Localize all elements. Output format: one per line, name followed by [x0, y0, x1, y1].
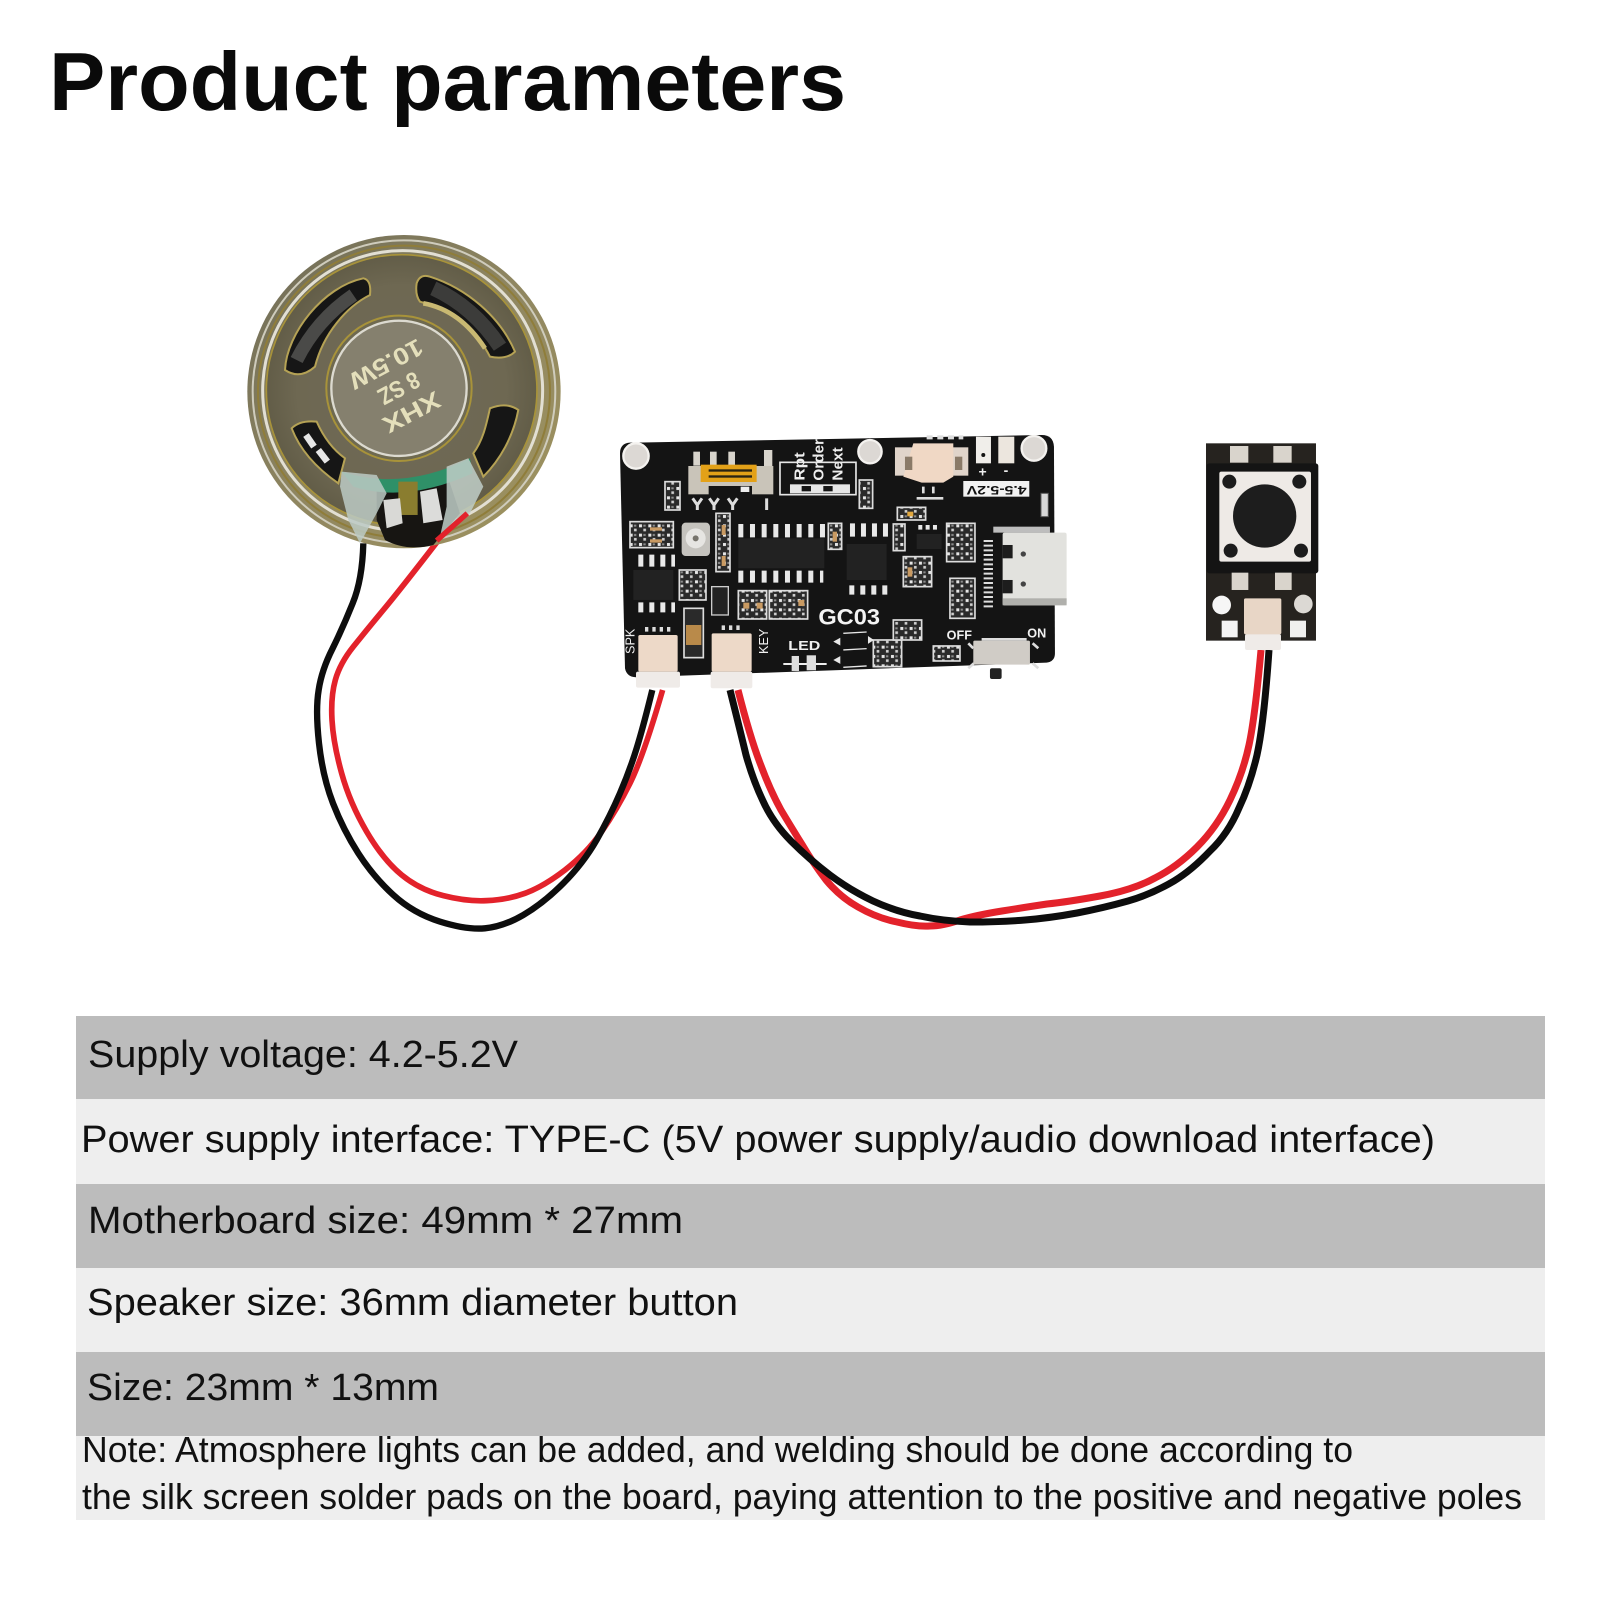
module holes and pads	[1212, 595, 1313, 637]
mode labels: Next	[830, 447, 846, 481]
row: note	[76, 1429, 1545, 1520]
chip pins	[638, 527, 940, 667]
mode labels	[780, 439, 856, 495]
LED pads	[783, 655, 827, 671]
silk labels: OFF	[947, 628, 972, 642]
wire: button black lead	[730, 650, 1269, 922]
row: speaker size	[76, 1268, 1545, 1352]
row: speaker size: Speaker size: 36mm diameter button	[87, 1282, 738, 1324]
wire: button red lead	[738, 650, 1261, 926]
tantalum capacitor	[684, 608, 703, 658]
USB type-C connector	[988, 527, 1067, 610]
speaker	[247, 235, 561, 548]
speaker centre cap	[326, 316, 472, 461]
silk labels: LED	[788, 639, 820, 653]
button pads	[1230, 446, 1292, 590]
specification table	[76, 1016, 1545, 1520]
silk labels	[624, 626, 1046, 654]
row: supply voltage: Supply voltage: 4.2-5.2V	[88, 1034, 519, 1076]
mode slide switch	[688, 450, 773, 510]
chips	[633, 534, 942, 615]
row: motherboard size: Motherboard size: 49mm * 27mm	[88, 1200, 683, 1242]
power pads: +	[979, 464, 987, 480]
title: Product parameters	[49, 35, 846, 128]
SPK connector	[636, 629, 680, 688]
circuit board	[620, 435, 1067, 688]
button white frame	[1219, 472, 1311, 562]
row: power supply interface: Power supply interface: TYPE-C (5V power supply/audio download interface)	[81, 1119, 1435, 1161]
indicator	[1041, 493, 1048, 517]
mode labels: Order	[811, 439, 827, 481]
voltage label: 4.5-5.2V	[967, 483, 1027, 497]
speaker centre cap: 10.5W	[344, 333, 427, 394]
speaker centre cap: 8 SZ	[373, 365, 424, 410]
button corner dots	[1222, 475, 1308, 558]
silk labels: ON	[1027, 626, 1046, 640]
row: power supply interface	[76, 1099, 1545, 1184]
small parts	[630, 480, 975, 667]
silk labels: KEY	[757, 628, 771, 654]
row: note: Note: Atmosphere lights can be added, and welding should be done according to	[82, 1429, 1353, 1470]
row: supply voltage	[76, 1016, 1545, 1099]
battery connector	[895, 437, 968, 498]
row: size: Size: 23mm * 13mm	[87, 1367, 439, 1409]
speaker centre cap: XHX	[378, 385, 445, 438]
mounting holes	[623, 436, 1046, 469]
mode labels: Rpt	[793, 452, 809, 481]
speaker solder terminals	[340, 458, 483, 547]
wire: speaker black lead	[317, 543, 652, 929]
silk labels: SPK	[624, 628, 638, 654]
voltage label	[963, 481, 1029, 497]
push button module	[1206, 443, 1318, 650]
row: motherboard size	[76, 1184, 1545, 1268]
speaker slots	[285, 276, 518, 483]
module connector	[1244, 598, 1281, 650]
trimmer potentiometer	[682, 523, 710, 556]
button cap	[1233, 484, 1296, 548]
power pads: -	[1004, 462, 1009, 478]
power pads	[976, 437, 1014, 480]
KEY connector	[711, 628, 752, 688]
slot highlights	[297, 288, 500, 462]
tan resistors	[650, 512, 913, 609]
power switch	[968, 639, 1038, 679]
wire: speaker red lead	[332, 542, 663, 901]
row: note: the silk screen solder pads on the board, paying attention to the positive and negative poles	[82, 1476, 1522, 1517]
board name: GC03	[818, 605, 880, 630]
row: size	[76, 1352, 1545, 1436]
